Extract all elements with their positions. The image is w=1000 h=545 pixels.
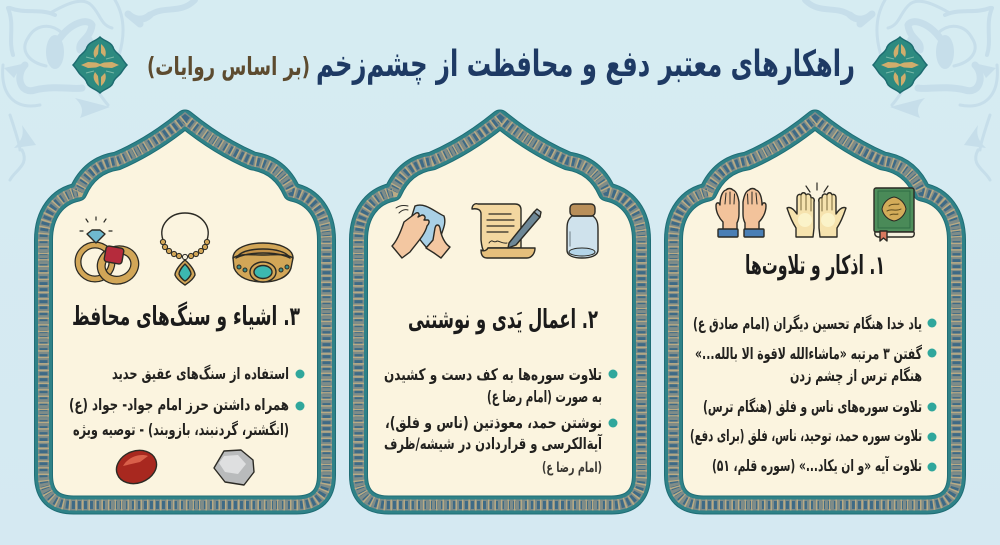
icon: raised hands with sleeves [716, 188, 766, 237]
ornament diamond right [873, 37, 927, 93]
icon: glass jar [567, 204, 598, 258]
subtitle: (بر اساس روایات) [147, 52, 310, 82]
icon: bracelet [233, 243, 293, 282]
heading 3: ۳. اشیاء و سنگ‌های محافظ [72, 301, 300, 332]
bullet list 3: استفاده از سنگ‌های عقیق حدید [112, 364, 289, 383]
icon: glowing praying hands [787, 183, 846, 237]
bullet list 2 [384, 365, 618, 476]
icon: red agate stone [112, 445, 161, 489]
panel frame 2 [358, 119, 642, 505]
icon: Quran book [874, 188, 914, 241]
panel frame 3 [44, 119, 326, 505]
bullet list 3 [69, 364, 304, 439]
icon: silver hadid stone [214, 450, 254, 485]
bullet list 2: (امام رضا ع) [542, 460, 602, 476]
panel 2: hand and writing practices [358, 119, 642, 505]
panel 1: recitations [674, 119, 956, 505]
icon: rings [78, 217, 139, 285]
bullet list 1: گفتن ۳ مرتبه «ماشاءالله لاقوة الا بالله...» [695, 344, 922, 363]
bullet list 2: نوشتن حمد، معوذتین (ناس و فلق)، [385, 413, 602, 432]
icon: hands wiping with cloth [392, 205, 450, 258]
icon: necklace [160, 213, 210, 285]
heading 1: ۱. اذکار و تلاوت‌ها [745, 251, 885, 281]
bullet list 1 [690, 314, 936, 475]
panel frame 1 [674, 119, 956, 505]
heading 2: ۲. اعمال یَدی و نوشتنی [408, 305, 598, 335]
panel 3: protective objects and stones [44, 119, 326, 505]
icon: scroll and pen [472, 204, 541, 258]
background ornament right [805, 0, 997, 180]
bullet list 1: هنگام ترس از چشم زدن [790, 366, 922, 386]
bullet list 3: (انگشتر، گردنبند، بازوبند) - توصیه ویژه [73, 420, 289, 439]
bullet list 2: آیةالکرسی و قراردادن در شیشه/ظرف [384, 433, 602, 453]
bullet list 3: همراه داشتن حرز امام جواد- جواد (ع) [69, 395, 289, 414]
bullet list 2: به صورت (امام رضا ع) [487, 387, 602, 406]
bullet list 2: تلاوت سوره‌ها به کف دست و کشیدن [384, 365, 602, 384]
background ornament left [3, 0, 195, 180]
ornament diamond left [73, 37, 127, 93]
